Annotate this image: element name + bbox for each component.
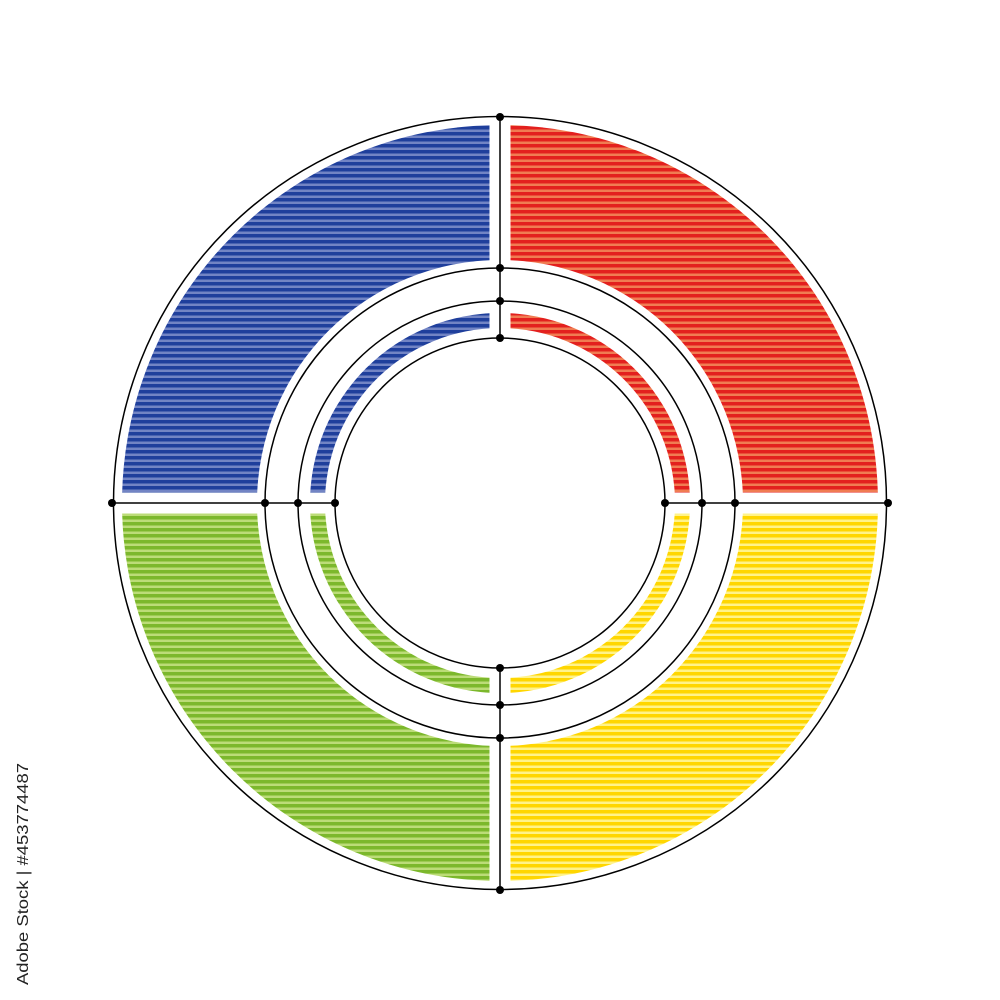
inner circle outlines	[265, 268, 735, 738]
connector lines	[112, 117, 888, 890]
watermark text: Adobe Stock | #453774487	[15, 763, 32, 985]
segment: green	[122, 514, 490, 881]
segment: yellow	[510, 514, 878, 881]
segment: red	[510, 125, 878, 492]
outer circle outline	[114, 116, 886, 890]
connector dots	[108, 113, 892, 894]
segment: blue	[122, 125, 490, 492]
